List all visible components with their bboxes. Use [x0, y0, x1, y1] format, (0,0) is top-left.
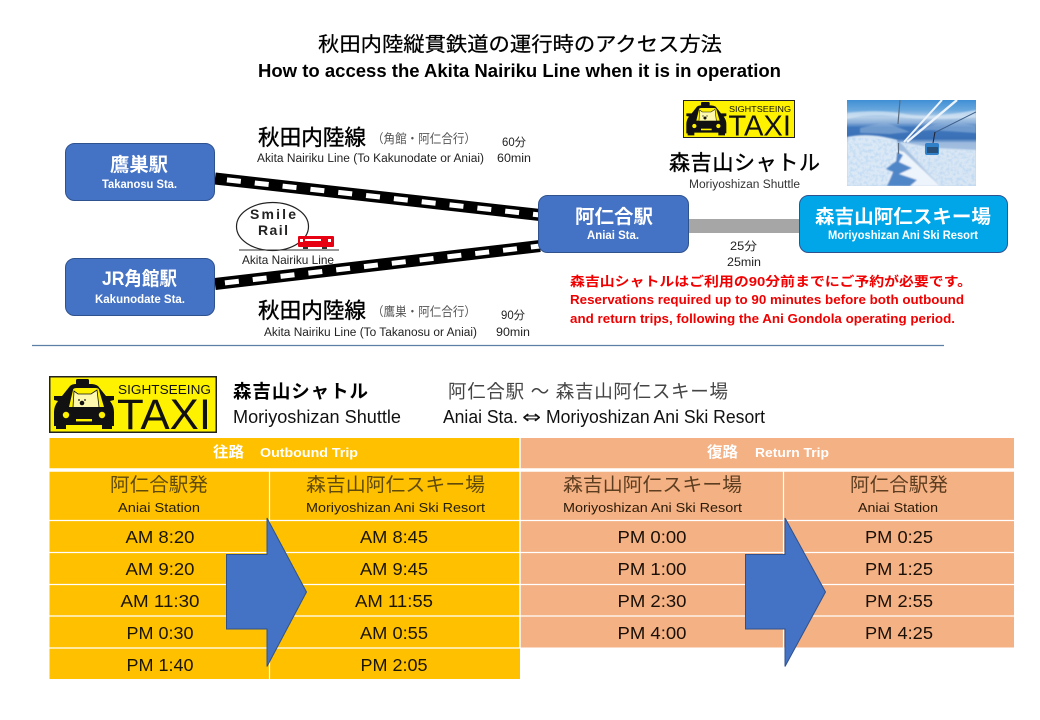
column head: ski resort arrival	[306, 474, 485, 515]
header: outbound: 往路	[213, 443, 244, 461]
column head: Aniai Station arrival	[850, 474, 948, 515]
times: return departures: PM 2:30	[618, 591, 687, 611]
rail line: Takanosu to Aniai	[215, 178, 540, 215]
logo: Smile Rail	[236, 202, 339, 267]
rail line: Kakunodate to Aniai	[215, 246, 540, 284]
icon: red train	[298, 236, 334, 249]
label: lower line: 秋田内陸線	[258, 299, 366, 323]
arrow: outbound direction	[226, 518, 306, 666]
column head: ski resort arrival: 森吉山阿仁スキー場	[306, 474, 485, 496]
times: outbound departures: PM 1:40	[126, 655, 194, 675]
heading: route: ⇔	[522, 407, 541, 428]
heading: route	[443, 381, 765, 428]
header: outbound	[213, 443, 358, 461]
station: Takanosu: Takanosu Sta.	[102, 177, 177, 191]
station: Kakunodate: JR角館駅	[102, 268, 177, 290]
label: lower line: 90min	[496, 327, 530, 339]
column head: ski resort departure: Moriyoshizan Ani Ski Resort	[563, 500, 742, 515]
label: lower line	[258, 299, 530, 339]
heading: shuttle name	[233, 381, 401, 427]
callout: reservation notice	[570, 274, 972, 326]
label: Moriyoshizan Shuttle: 森吉山シャトル	[669, 152, 820, 175]
times: outbound departures: AM 8:20	[126, 527, 195, 547]
station: Kakunodate	[66, 258, 214, 316]
station: Aniai: Aniai Sta.	[587, 228, 639, 242]
column head: Aniai Station arrival: 阿仁合駅発	[850, 474, 948, 496]
table: outbound trip	[50, 438, 520, 679]
times: return departures: PM 0:00	[618, 527, 687, 547]
arrow: return direction	[746, 518, 826, 666]
column head: Aniai Station departure	[110, 474, 208, 515]
logo: Smile Rail: Akita Nairiku Line	[242, 253, 334, 267]
table: return trip	[520, 438, 1014, 648]
station: Kakunodate: Kakunodate Sta.	[95, 292, 185, 306]
logo: small sightseeing taxi	[684, 101, 795, 142]
label: lower line: 90分	[501, 309, 525, 322]
callout: reservation notice: and return trips, following the Ani Gondola operating period.	[570, 311, 955, 326]
label: upper line: 60min	[497, 153, 531, 165]
heading: route: Moriyoshizan Ani Ski Resort	[546, 407, 765, 427]
label: Moriyoshizan Shuttle: Moriyoshizan Shuttle	[689, 179, 800, 191]
times: return departures	[618, 527, 687, 643]
column head: Aniai Station arrival: Aniai Station	[858, 500, 938, 515]
logo: small sightseeing taxi: SIGHTSEEING	[729, 104, 791, 114]
label: upper line: Akita Nairiku Line (To Kakunodate or Aniai)	[257, 153, 484, 165]
logo: small sightseeing taxi: TAXI	[728, 110, 791, 142]
header: return: 復路	[707, 443, 738, 461]
logo: large sightseeing taxi: TAXI	[117, 391, 211, 439]
label: shuttle travel time: 25min	[727, 257, 761, 269]
connector: shuttle road	[689, 219, 799, 233]
label: lower line: Akita Nairiku Line (To Takanosu or Aniai)	[264, 327, 477, 339]
label: shuttle travel time	[727, 240, 761, 269]
header: return	[707, 443, 829, 461]
times: outbound arrivals: AM 8:45	[360, 527, 428, 547]
callout: reservation notice: Reservations required up to 90 minutes before both outbound	[570, 292, 964, 307]
times: outbound departures: AM 11:30	[120, 591, 200, 611]
times: return arrivals	[865, 527, 933, 643]
times: outbound departures: AM 9:20	[126, 559, 195, 579]
logo: large sightseeing taxi	[50, 377, 216, 439]
header: outbound: Outbound Trip	[260, 445, 358, 460]
times: outbound arrivals: AM 11:55	[355, 591, 433, 611]
column head: ski resort departure	[563, 474, 742, 515]
times: outbound arrivals: AM 0:55	[360, 623, 428, 643]
times: outbound departures: PM 0:30	[126, 623, 194, 643]
callout: reservation notice: 森吉山シャトルはご利用の90分前までにご予約が必要です。	[570, 274, 972, 289]
label: upper line: 秋田内陸線	[258, 126, 366, 150]
times: outbound arrivals	[355, 527, 433, 675]
logo: Smile Rail: Rail	[258, 222, 288, 238]
column head: Aniai Station departure: 阿仁合駅発	[110, 474, 208, 496]
logo: Smile Rail: Smile	[250, 206, 296, 222]
logo: large sightseeing taxi: SIGHTSEEING	[118, 383, 211, 397]
label: upper line: 60分	[502, 136, 526, 149]
times: return arrivals: PM 0:25	[865, 527, 933, 547]
heading: shuttle name: 森吉山シャトル	[233, 381, 368, 402]
title: English: How to access the Akita Nairiku Line when it is in operation	[258, 61, 781, 81]
label: shuttle travel time: 25分	[730, 240, 758, 253]
times: return arrivals: PM 1:25	[865, 559, 933, 579]
label: upper line: （角館・阿仁合行）	[372, 132, 476, 146]
heading: shuttle name: Moriyoshizan Shuttle	[233, 407, 401, 427]
column head: Aniai Station departure: Aniai Station	[118, 500, 200, 515]
label: Moriyoshizan Shuttle	[669, 152, 820, 191]
station: Moriyoshizan Ani Ski Resort: Moriyoshizan Ani Ski Resort	[828, 228, 978, 242]
station: Aniai: 阿仁合駅	[575, 206, 653, 228]
label: lower line: （鷹巣・阿仁合行）	[372, 305, 476, 319]
heading: route: 阿仁合駅 ～ 森吉山阿仁スキー場	[448, 381, 728, 402]
photo: gondola over snowy trees	[847, 100, 976, 186]
label: upper line	[257, 126, 531, 165]
times: return arrivals: PM 2:55	[865, 591, 933, 611]
times: return departures: PM 4:00	[618, 623, 687, 643]
station: Takanosu: 鷹巣駅	[110, 154, 168, 176]
column head: ski resort departure: 森吉山阿仁スキー場	[563, 474, 742, 496]
column head: ski resort arrival: Moriyoshizan Ani Ski Resort	[306, 500, 485, 515]
title: Japanese: 秋田内陸縦貫鉄道の運行時のアクセス方法	[318, 33, 722, 56]
station: Aniai	[538, 196, 688, 252]
times: outbound arrivals: AM 9:45	[360, 559, 428, 579]
station: Moriyoshizan Ani Ski Resort	[800, 196, 1008, 252]
station: Moriyoshizan Ani Ski Resort: 森吉山阿仁スキー場	[815, 206, 991, 228]
times: outbound arrivals: PM 2:05	[360, 655, 428, 675]
times: outbound departures	[120, 527, 200, 675]
times: return departures: PM 1:00	[618, 559, 687, 579]
times: return arrivals: PM 4:25	[865, 623, 933, 643]
heading: route: Aniai Sta.	[443, 407, 518, 427]
header: return: Return Trip	[755, 445, 829, 460]
station: Takanosu	[66, 144, 214, 200]
